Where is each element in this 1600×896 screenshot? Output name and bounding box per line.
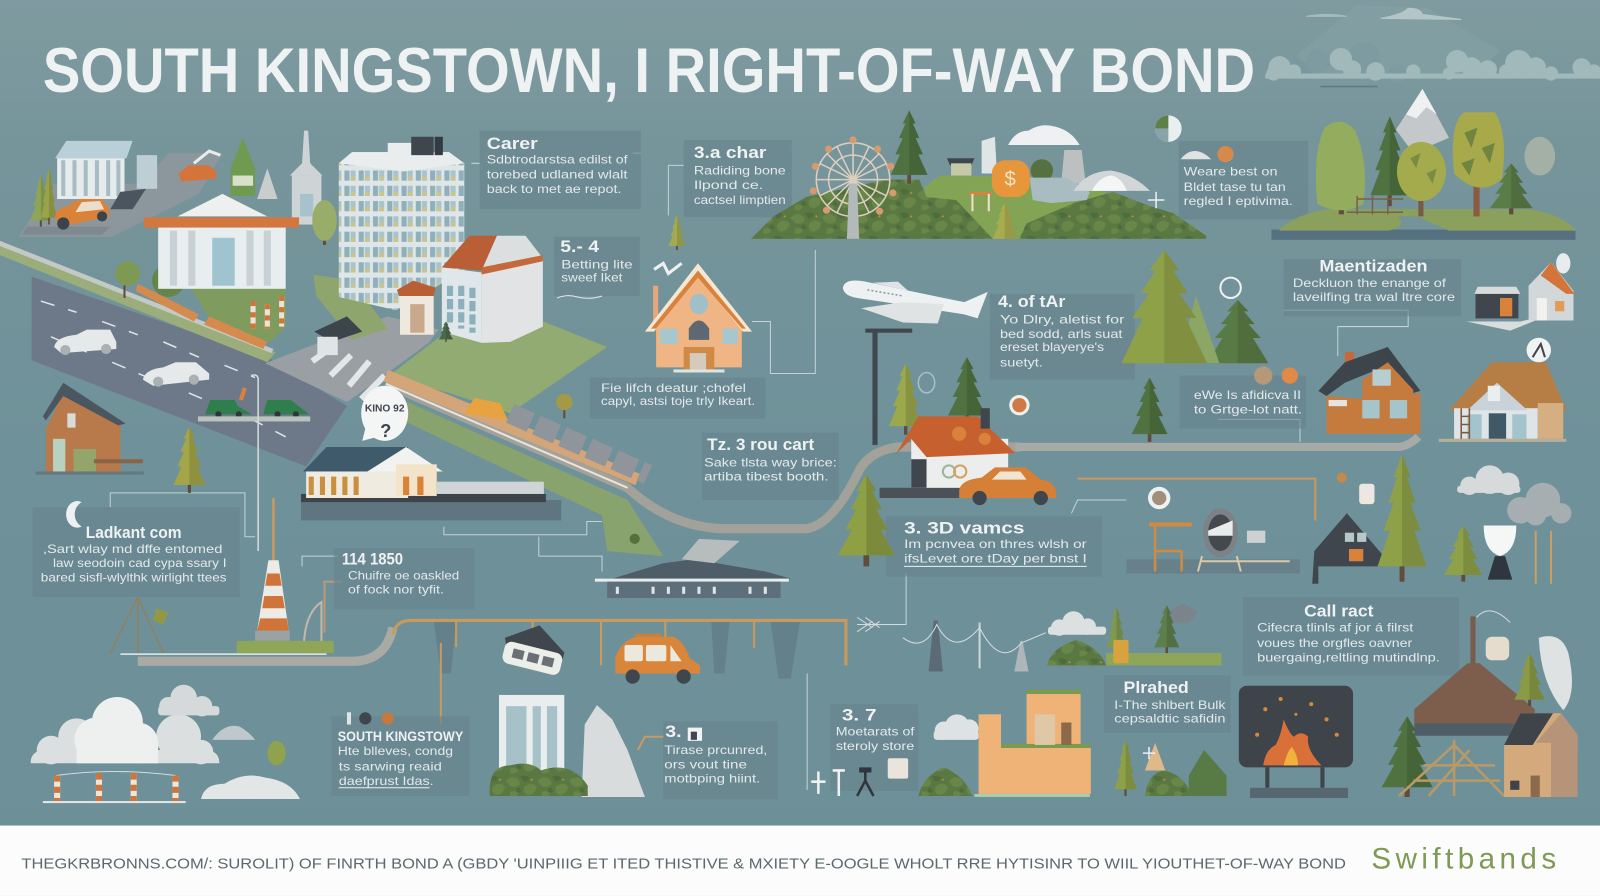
panel: Call ract: Call ract <box>1304 602 1374 620</box>
church tower <box>290 131 322 225</box>
panel: South Kingstowy: SOUTH KINGSTOWY <box>338 729 463 744</box>
river strip <box>1271 230 1576 240</box>
panel: South Kingstowy: daefprust Idas. <box>339 774 434 788</box>
panel: Call ract: Cifecra tlinls af jor á filrst <box>1257 621 1414 635</box>
panel: 3. Tirase: 3. <box>665 723 682 741</box>
illustration: orange barn house <box>1318 347 1420 434</box>
illustration: bridge deck with pipe <box>393 620 846 724</box>
grass <box>237 641 334 653</box>
panel: Tz. 3 rou cart: Sake tlsta way brice: <box>704 455 837 469</box>
illustration: small farmhouse <box>1466 253 1574 331</box>
road <box>138 628 393 661</box>
illustration: tower and tripod <box>110 498 393 661</box>
illustration: red roof house with car <box>880 357 1056 505</box>
illustration: boat shape <box>499 618 569 676</box>
classical building <box>55 141 133 158</box>
dark car <box>110 189 146 209</box>
illustration: tan cottage <box>1439 338 1566 442</box>
mountain <box>1396 89 1449 153</box>
panel: Tz. 3 rou cart: Tz. 3 rou cart <box>707 436 815 454</box>
panel: Plrahed: Plrahed <box>1123 679 1189 697</box>
panel: Call ract <box>1243 597 1459 676</box>
cars on road <box>54 330 310 551</box>
panel: eWe Is: to Grtge-lot natt. <box>1194 402 1302 416</box>
decorative clouds behind title <box>1265 5 1600 87</box>
panel: Weare best on: regled I eptivima. <box>1184 194 1293 208</box>
panel: 5.-4: sweef Iket <box>561 271 623 285</box>
panel: 3.a char <box>684 140 792 217</box>
icon <box>688 728 702 741</box>
icon circle <box>1527 338 1551 362</box>
illustration: parking and classical building <box>18 131 337 245</box>
panel: 4. of tAr: 4. of tAr <box>998 293 1066 311</box>
illustration: small trees and steeple <box>1114 740 1227 796</box>
panel: Fie lifch <box>590 378 765 418</box>
illustration: road and rail corridor <box>0 241 1020 556</box>
panel: Fie lifch: Fie lifch deatur ;chofel <box>601 381 746 395</box>
panel: Maentizaden: Deckluon the enange of <box>1293 276 1447 290</box>
ground <box>1280 209 1576 231</box>
panel: 4. of tAr: ereset blayerye's <box>1000 340 1104 354</box>
circle icon <box>1148 487 1170 509</box>
tripod <box>110 597 163 653</box>
small cloud <box>158 685 219 716</box>
green verge <box>0 243 276 362</box>
illustration: power lines <box>857 617 1046 671</box>
panel: Ladkant com: bared sisfl-wlylthk wirlight ttees <box>41 571 227 585</box>
panel: Maentizaden <box>1284 257 1461 316</box>
lawn <box>388 320 607 413</box>
panel: Call ract: buergaing,reltling mutindlnp. <box>1257 650 1440 664</box>
dome 2 <box>1073 170 1150 191</box>
panel: 3D vamcs <box>886 516 1102 577</box>
icon: tree <box>173 427 205 493</box>
hill <box>924 176 1153 239</box>
ring icon <box>1220 278 1241 298</box>
tan building <box>1504 713 1578 797</box>
panel: 5.-4: Betting lite <box>561 257 633 271</box>
rail band lawn <box>403 400 663 556</box>
antenna <box>304 602 321 641</box>
small pine <box>1490 163 1533 214</box>
dark round bush <box>1031 159 1053 182</box>
panel: 114 1850 <box>334 548 474 609</box>
tall pine <box>891 110 928 184</box>
tree <box>323 212 326 245</box>
small hall <box>947 158 974 165</box>
panel: Tz. 3 rou cart <box>702 433 839 500</box>
illustration: lamp with clouds <box>1457 465 1571 584</box>
panel: Carer: back to met ae repot. <box>487 182 621 196</box>
fence <box>1347 196 1403 214</box>
panel: Plrahed <box>1104 676 1231 733</box>
panel: 4. of tAr <box>990 293 1135 380</box>
illustration: ferris wheel and hill park: $ <box>1005 169 1017 191</box>
panel: 4. of tAr: Yo Dlry, aletist for <box>1000 313 1124 327</box>
panel: 5.-4 <box>554 237 640 298</box>
car <box>959 467 1056 498</box>
gray spire <box>257 168 278 199</box>
panel: 4. of tAr: bed sodd, arls suat <box>1000 327 1123 341</box>
green truck 2 <box>263 400 309 417</box>
connector lines <box>110 153 1408 790</box>
illustration: table and kettle scene <box>1127 487 1300 574</box>
crosswalk <box>312 351 385 399</box>
ferris wheel <box>816 143 890 216</box>
crescent icon <box>66 501 82 528</box>
panel: Weare best on: Weare best on <box>1184 165 1278 179</box>
illustration: columned hall <box>115 194 299 349</box>
panel: 3. Tirase: Tirase prcunred, <box>664 743 767 757</box>
callout bubble <box>361 386 408 441</box>
panel: 3D vamcs: Im pcnvea on thres wlsh or <box>904 537 1087 551</box>
cone tower <box>272 498 275 561</box>
footer text: THEGKRBRONNS.COM/: SUROLIT) OF FINRTH BOND A (GBDY 'UINPIIIG ET ITED THISTIVE & MXIETY E-OOGLE WHOLT RRE HYTISINR TO WIIL YIOUTHET-OF-WAY BOND <box>21 856 1346 872</box>
orange car <box>55 199 109 227</box>
big tree <box>1473 174 1480 216</box>
panel: Carer <box>480 131 641 209</box>
brand wordmark: Swiftbands <box>1371 842 1556 875</box>
illustration: glass building and rock <box>490 695 645 797</box>
panel: 114 1850: 114 1850 <box>342 550 403 568</box>
panel: 3D vamcs: ifsLevet ore tDay per bnst I <box>904 551 1087 565</box>
orange balloon <box>992 160 1030 197</box>
small lawn tree <box>563 398 565 418</box>
lane markings <box>41 301 286 437</box>
gatehouse <box>400 288 434 335</box>
green tower <box>231 138 255 196</box>
panel: Weare best on: Bldet tase tu tan <box>1184 180 1286 194</box>
panel: 114 1850: Chuifre oe oaskled <box>348 569 459 583</box>
dome <box>1008 125 1080 145</box>
panel: 3D vamcs: 3. 3D vamcs <box>904 520 1024 538</box>
panel: 3. 7 Moetarats <box>831 704 918 791</box>
orange roof on lawn <box>464 398 508 420</box>
panel: Weare best on <box>1179 141 1308 219</box>
icons <box>1181 146 1234 162</box>
title: SOUTH KINGSTOWN, I RIGHT-OF-WAY BOND <box>43 36 1255 106</box>
round tree <box>1418 189 1423 216</box>
panel: 114 1850: of fock nor tyfit. <box>348 582 444 596</box>
tiny cloud <box>212 726 255 740</box>
scaffold <box>1399 740 1504 796</box>
illustration: brick house left <box>36 383 144 475</box>
tree left <box>1339 184 1344 214</box>
panel: Carer: Carer <box>487 135 539 153</box>
illustration: ferris wheel and hill park <box>751 110 1206 239</box>
orange conduit <box>1078 479 1315 520</box>
balloon <box>267 741 286 765</box>
panel: 3.a char: 3.a char <box>694 144 767 162</box>
illustration: peach house <box>645 263 752 372</box>
illustration: orange taxi <box>615 634 700 684</box>
footer band <box>0 826 1600 896</box>
icons: tools <box>811 767 873 796</box>
panel: Call ract: voues the orgfles oavner <box>1257 636 1412 650</box>
panel: Fie lifch: capyl, astsi toje trly Ikeart. <box>601 394 755 408</box>
panel: Ladkant com: Ladkant com <box>86 524 182 542</box>
small dark roof house <box>314 316 362 342</box>
panel: eWe Is <box>1180 366 1306 429</box>
road east <box>1015 437 1418 447</box>
road surface <box>32 277 347 466</box>
icon: pine <box>1132 378 1168 442</box>
small pine <box>439 321 453 342</box>
icon: small pine <box>668 215 686 250</box>
panel: Plrahed: cepsaldtic safidin <box>1114 711 1226 725</box>
panel: 3. 7 Moetarats: 3. 7 <box>842 706 877 724</box>
rail road <box>386 384 1020 529</box>
panel: 3. 7 Moetarats: Moetarats of <box>836 725 915 739</box>
tower <box>982 137 997 174</box>
illustration: top-right park <box>1271 89 1576 240</box>
pine <box>1370 116 1409 206</box>
callout bubble: KINO 92 <box>365 403 405 414</box>
orange vehicle <box>179 165 216 182</box>
illustration: fort <box>918 690 1091 797</box>
illustration: brown hut with scaffold <box>1382 611 1578 797</box>
panel: 5.-4: 5.- 4 <box>560 238 599 256</box>
panel: South Kingstowy <box>332 712 469 796</box>
panel: Maentizaden: laveilfing tra wal ltre core <box>1293 290 1455 304</box>
illustration: airplane <box>843 281 988 324</box>
panel: 3.a char: cactsel limptien <box>694 193 786 207</box>
panel: Carer: torebed udlaned wlalt <box>487 168 628 182</box>
white car <box>54 330 116 353</box>
plus icon <box>1148 192 1164 208</box>
small icon <box>888 758 908 779</box>
panel: Carer: Sdbtrodarstsa edilst of <box>487 152 628 166</box>
panel: 3. 7 Moetarats: steroly store <box>836 739 915 753</box>
white car 2 <box>143 362 209 386</box>
panel: 3. Tirase <box>638 721 778 799</box>
ground cloud <box>201 776 300 799</box>
panel: Maentizaden: Maentizaden <box>1319 257 1428 275</box>
panel: 3.a char: Radiding bone <box>694 164 786 178</box>
panel: Ladkant com: law seodoin cad cypa ssary I <box>53 556 227 570</box>
icons <box>347 712 394 725</box>
illustration: station underpass <box>595 534 791 598</box>
illustration: fire screen <box>1239 686 1353 798</box>
panel: eWe Is: eWe Is afidicva II <box>1194 388 1301 402</box>
icon: pine <box>838 475 895 566</box>
panel: 4. of tAr: suetyt. <box>1000 355 1043 369</box>
plant <box>1061 150 1086 184</box>
panel: Ladkant com <box>33 501 240 597</box>
illustration: clouds and barrier bottom left <box>31 685 300 803</box>
globe icon <box>1155 115 1182 142</box>
icons <box>1254 366 1298 385</box>
panel: Tz. 3 rou cart: artiba tibest booth. <box>704 470 829 484</box>
panel: Ladkant com: ,Sart wlay md dffe entomed <box>43 542 223 556</box>
big cloud <box>31 714 219 764</box>
plaza <box>265 316 439 402</box>
barrier <box>56 771 176 776</box>
panel: Plrahed: I-The shlbert Bulk <box>1114 698 1227 712</box>
illustration: terracotta roof block <box>314 236 543 355</box>
panel: 3. Tirase: motbping hiint. <box>664 772 760 786</box>
illustration: dark house and pines <box>1312 454 1483 584</box>
panel: 3. Tirase: ors vout tine <box>664 757 747 771</box>
illustration: apartment tower <box>339 137 464 310</box>
lamp post <box>251 375 258 551</box>
panel: 3.a char: Ilpond ce. <box>694 178 763 192</box>
illustration: station <box>301 447 561 520</box>
ring icon <box>1524 137 1555 176</box>
small olive pine <box>993 203 1017 239</box>
illustration: pines cluster <box>1121 250 1268 363</box>
icon: street lamp <box>865 329 912 445</box>
panel: South Kingstowy: ts sarwing reaid <box>339 759 442 773</box>
illustration: small landscape strip <box>1047 603 1221 665</box>
green truck <box>205 400 252 417</box>
callout bubble: ? <box>380 420 391 441</box>
panel: South Kingstowy: Hte blleves, condg <box>338 744 453 758</box>
bush band <box>751 180 993 239</box>
pine <box>1382 716 1433 797</box>
